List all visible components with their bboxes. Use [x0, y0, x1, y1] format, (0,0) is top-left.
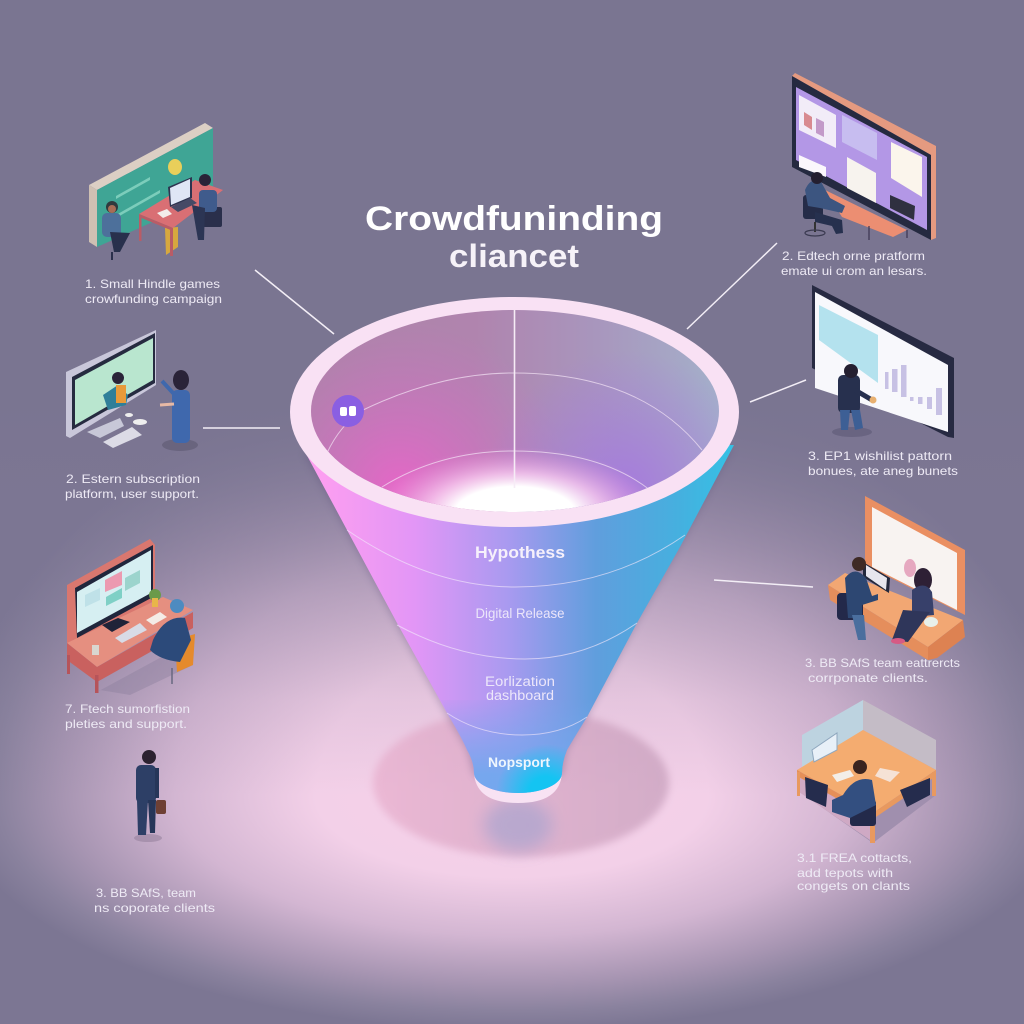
panel: item 3.1 right bottom	[797, 700, 936, 893]
caption: crowfunding campaign	[85, 292, 222, 306]
caption: 2. Edtech orne pratform	[782, 249, 925, 263]
funnel stage labels: Nopsport	[488, 755, 551, 770]
title	[365, 200, 663, 274]
illustration: monitor and woman	[66, 330, 198, 451]
funnel floor shadow	[373, 709, 669, 857]
caption: 3. BB SAfS, team	[96, 886, 196, 900]
caption: ns coporate clients	[94, 901, 215, 915]
funnel spout rim	[474, 773, 562, 803]
title: Crowdfuninding	[365, 200, 663, 238]
caption: 3.1 FREA cottacts,	[797, 851, 912, 865]
illustration: board and desk	[89, 123, 223, 260]
caption: 2. Estern subscription	[66, 472, 200, 486]
panel: item 2 left	[65, 330, 200, 501]
funnel cone body	[304, 445, 734, 793]
caption: 3. BB SAfS team eattrercts	[805, 656, 960, 670]
funnel outer rim	[290, 297, 739, 527]
funnel stage labels: Digital Release	[476, 605, 565, 621]
illustration: standing man	[134, 750, 166, 842]
caption: congets on clants	[797, 879, 910, 893]
caption	[85, 277, 222, 306]
panel: item 3 B2B right	[805, 496, 965, 685]
caption: pleties and support.	[65, 717, 187, 731]
illustration: desk with monitor	[67, 539, 195, 695]
caption	[805, 656, 960, 685]
caption: add tepots with	[797, 866, 893, 880]
caption	[781, 249, 927, 278]
title: cliancet	[449, 238, 579, 274]
illustration: meeting room	[797, 700, 936, 843]
panel: item 1 left top	[85, 123, 223, 306]
funnel stage labels: dashboard	[486, 688, 554, 703]
funnel	[290, 297, 739, 803]
caption	[797, 851, 912, 893]
caption	[94, 886, 215, 915]
illustration: team at long desk	[828, 496, 965, 660]
funnel stage labels: Hypothess	[475, 544, 565, 562]
caption: corrponate clients.	[808, 671, 928, 685]
caption: 7. Ftech sumorfistion	[65, 702, 190, 716]
panel: item 3 right	[808, 285, 958, 478]
funnel neck shading	[441, 700, 596, 793]
panel: item 7 left	[65, 539, 195, 731]
caption: 1. Small Hindle games	[85, 277, 220, 291]
funnel stage labels	[475, 544, 565, 770]
panel: standing man item	[94, 750, 215, 915]
caption: bonues, ate aneg bunets	[808, 464, 958, 478]
funnel interior	[310, 305, 720, 515]
illustration: wall screen and desk	[792, 73, 936, 240]
funnel band lines	[347, 530, 685, 735]
funnel shadow	[303, 448, 733, 776]
panel: item 2 right top	[781, 73, 936, 278]
caption	[65, 472, 200, 501]
caption: platform, user support.	[65, 487, 199, 501]
funnel stage labels: Eorlization	[485, 674, 555, 689]
caption: emate ui crom an lesars.	[781, 264, 927, 278]
caption	[808, 449, 958, 478]
connector lines	[203, 243, 813, 587]
icon: purple badge	[332, 395, 364, 427]
illustration: chart screen and presenter	[812, 285, 954, 438]
caption: 3. EP1 wishilist pattorn	[808, 449, 952, 463]
caption	[65, 702, 190, 731]
